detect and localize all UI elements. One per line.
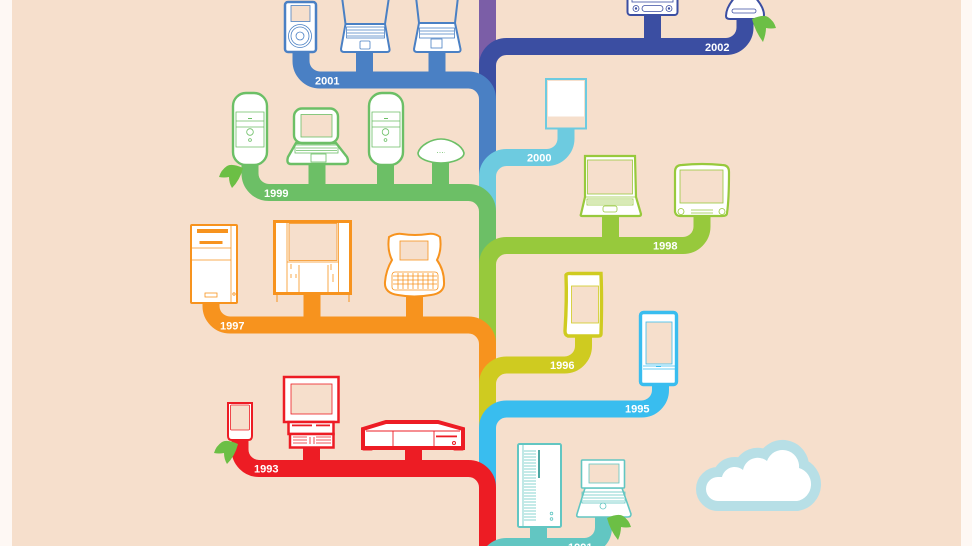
- icon: leaf: [214, 441, 238, 464]
- trunk: top purple section: [479, 0, 496, 80]
- cloud: [706, 450, 811, 501]
- device: iPod: [285, 2, 316, 52]
- year label 1998: 1998: [653, 240, 677, 252]
- branch: 1993: [214, 377, 488, 546]
- device: Newton: [228, 403, 252, 440]
- year label 2001: 2001: [315, 76, 339, 88]
- branch: 1996: [488, 273, 602, 435]
- branch: 1997: [191, 222, 488, 385]
- device: dome base station: [726, 0, 764, 19]
- device: AirPort dome: [418, 139, 464, 163]
- device: handheld: [565, 273, 602, 336]
- branch: 1998: [488, 156, 729, 345]
- year label 1997: 1997: [220, 320, 244, 332]
- branch: 2002: [488, 0, 776, 110]
- device: Macintosh TV: [284, 377, 338, 448]
- year label 2000: 2000: [527, 152, 551, 164]
- branch: 1991: [488, 444, 631, 546]
- device: tablet: [546, 79, 586, 128]
- branch: 1999: [219, 93, 488, 270]
- device: iBook clamshell: [287, 108, 348, 164]
- device: MessagePad: [640, 312, 676, 384]
- year label 1995: 1995: [625, 404, 649, 416]
- branch: 2000: [488, 79, 586, 225]
- device: tower: [191, 225, 237, 303]
- year label 1993: 1993: [254, 464, 278, 476]
- device: iBook: [414, 0, 461, 52]
- icon: leaf: [752, 16, 776, 42]
- device: Twentieth Anniversary Mac: [274, 222, 350, 302]
- device: PowerBook 1991: [577, 460, 631, 517]
- device: Quadra tower: [518, 444, 561, 527]
- branch: 1995: [488, 312, 676, 500]
- year label 2002: 2002: [705, 42, 729, 54]
- icon: leaf: [219, 165, 243, 188]
- device: Power Mac tower left: [233, 93, 267, 165]
- device: iMac: [675, 164, 729, 216]
- device: set-top box: [362, 422, 464, 450]
- device: Power Mac tower right: [369, 93, 403, 165]
- device: PowerBook G3: [581, 156, 641, 216]
- icon: leaf: [607, 515, 631, 540]
- branch: 2001: [285, 0, 488, 185]
- year label 1999: 1999: [264, 188, 288, 200]
- year label 1996: 1996: [550, 360, 574, 372]
- device: PowerBook: [341, 0, 390, 52]
- device: eMate: [385, 234, 444, 296]
- device: hi-fi unit: [628, 0, 678, 15]
